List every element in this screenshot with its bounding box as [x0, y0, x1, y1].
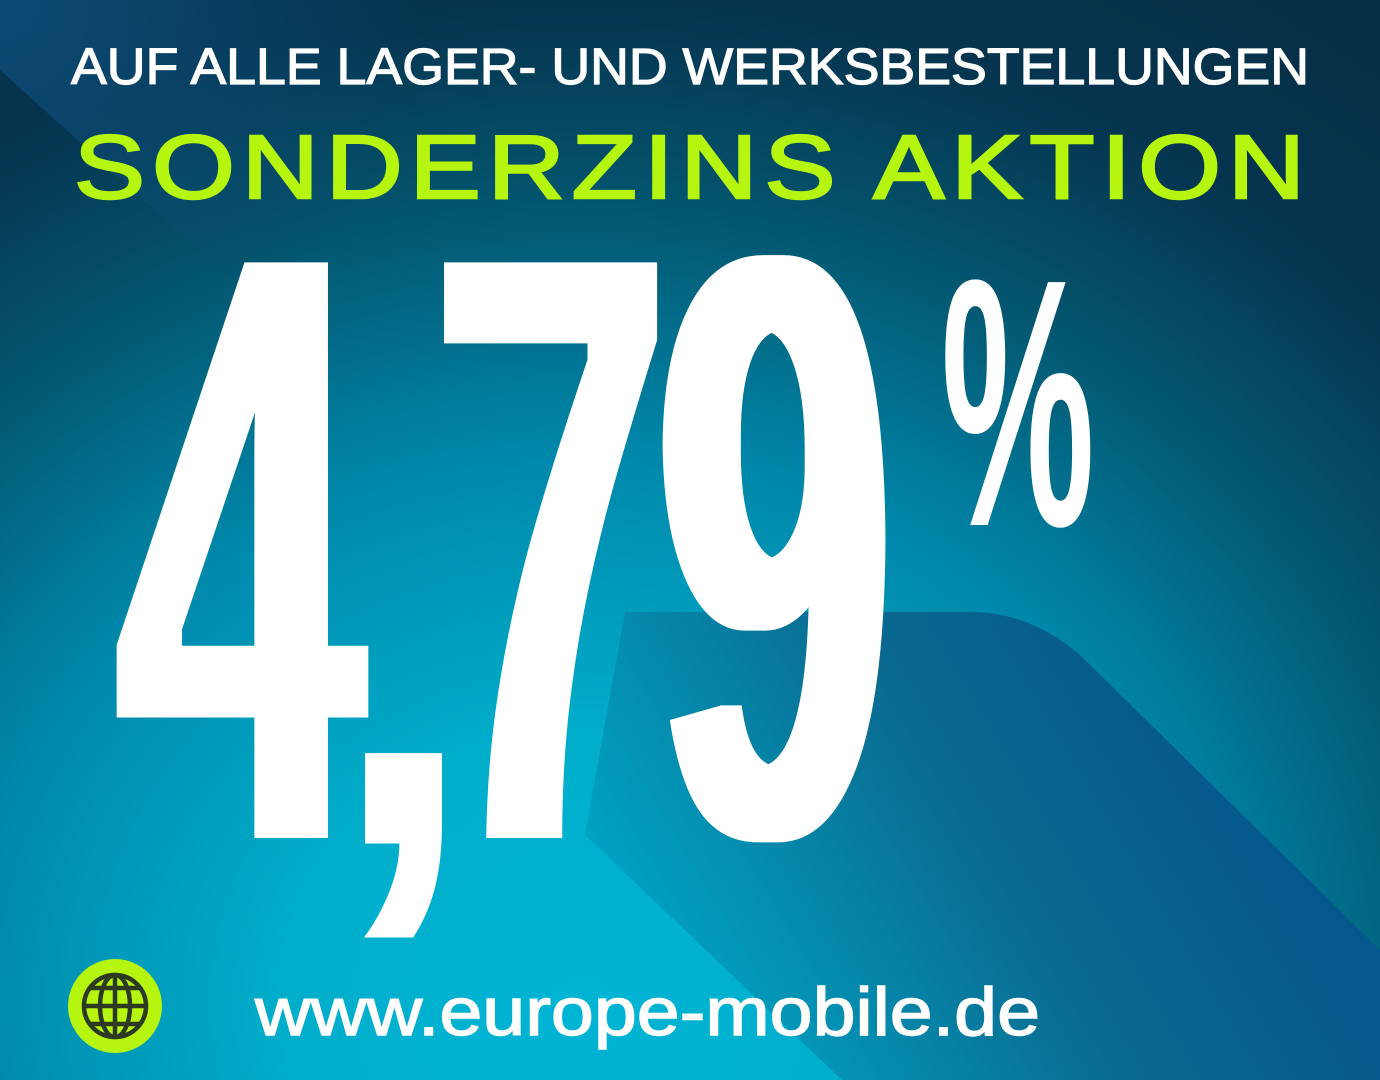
big rate figure: 4	[118, 68, 365, 1029]
background corner facet	[0, 0, 420, 450]
headline: special rate promotion: SONDERZINS AKTION	[74, 118, 1312, 218]
big rate figure	[118, 68, 891, 1029]
percent sign: %	[941, 205, 1095, 600]
icon: globe badge	[68, 959, 162, 1053]
website url: www.europe-mobile.de	[254, 974, 1040, 1050]
background blue rounded shape	[585, 612, 1380, 1080]
big rate figure: ,	[327, 295, 478, 973]
big rate figure: 9	[658, 72, 891, 1023]
big rate figure: 7	[434, 68, 668, 1029]
headline: order types: AUF ALLE LAGER- UND WERKSBESTELLUNGEN	[71, 38, 1309, 95]
